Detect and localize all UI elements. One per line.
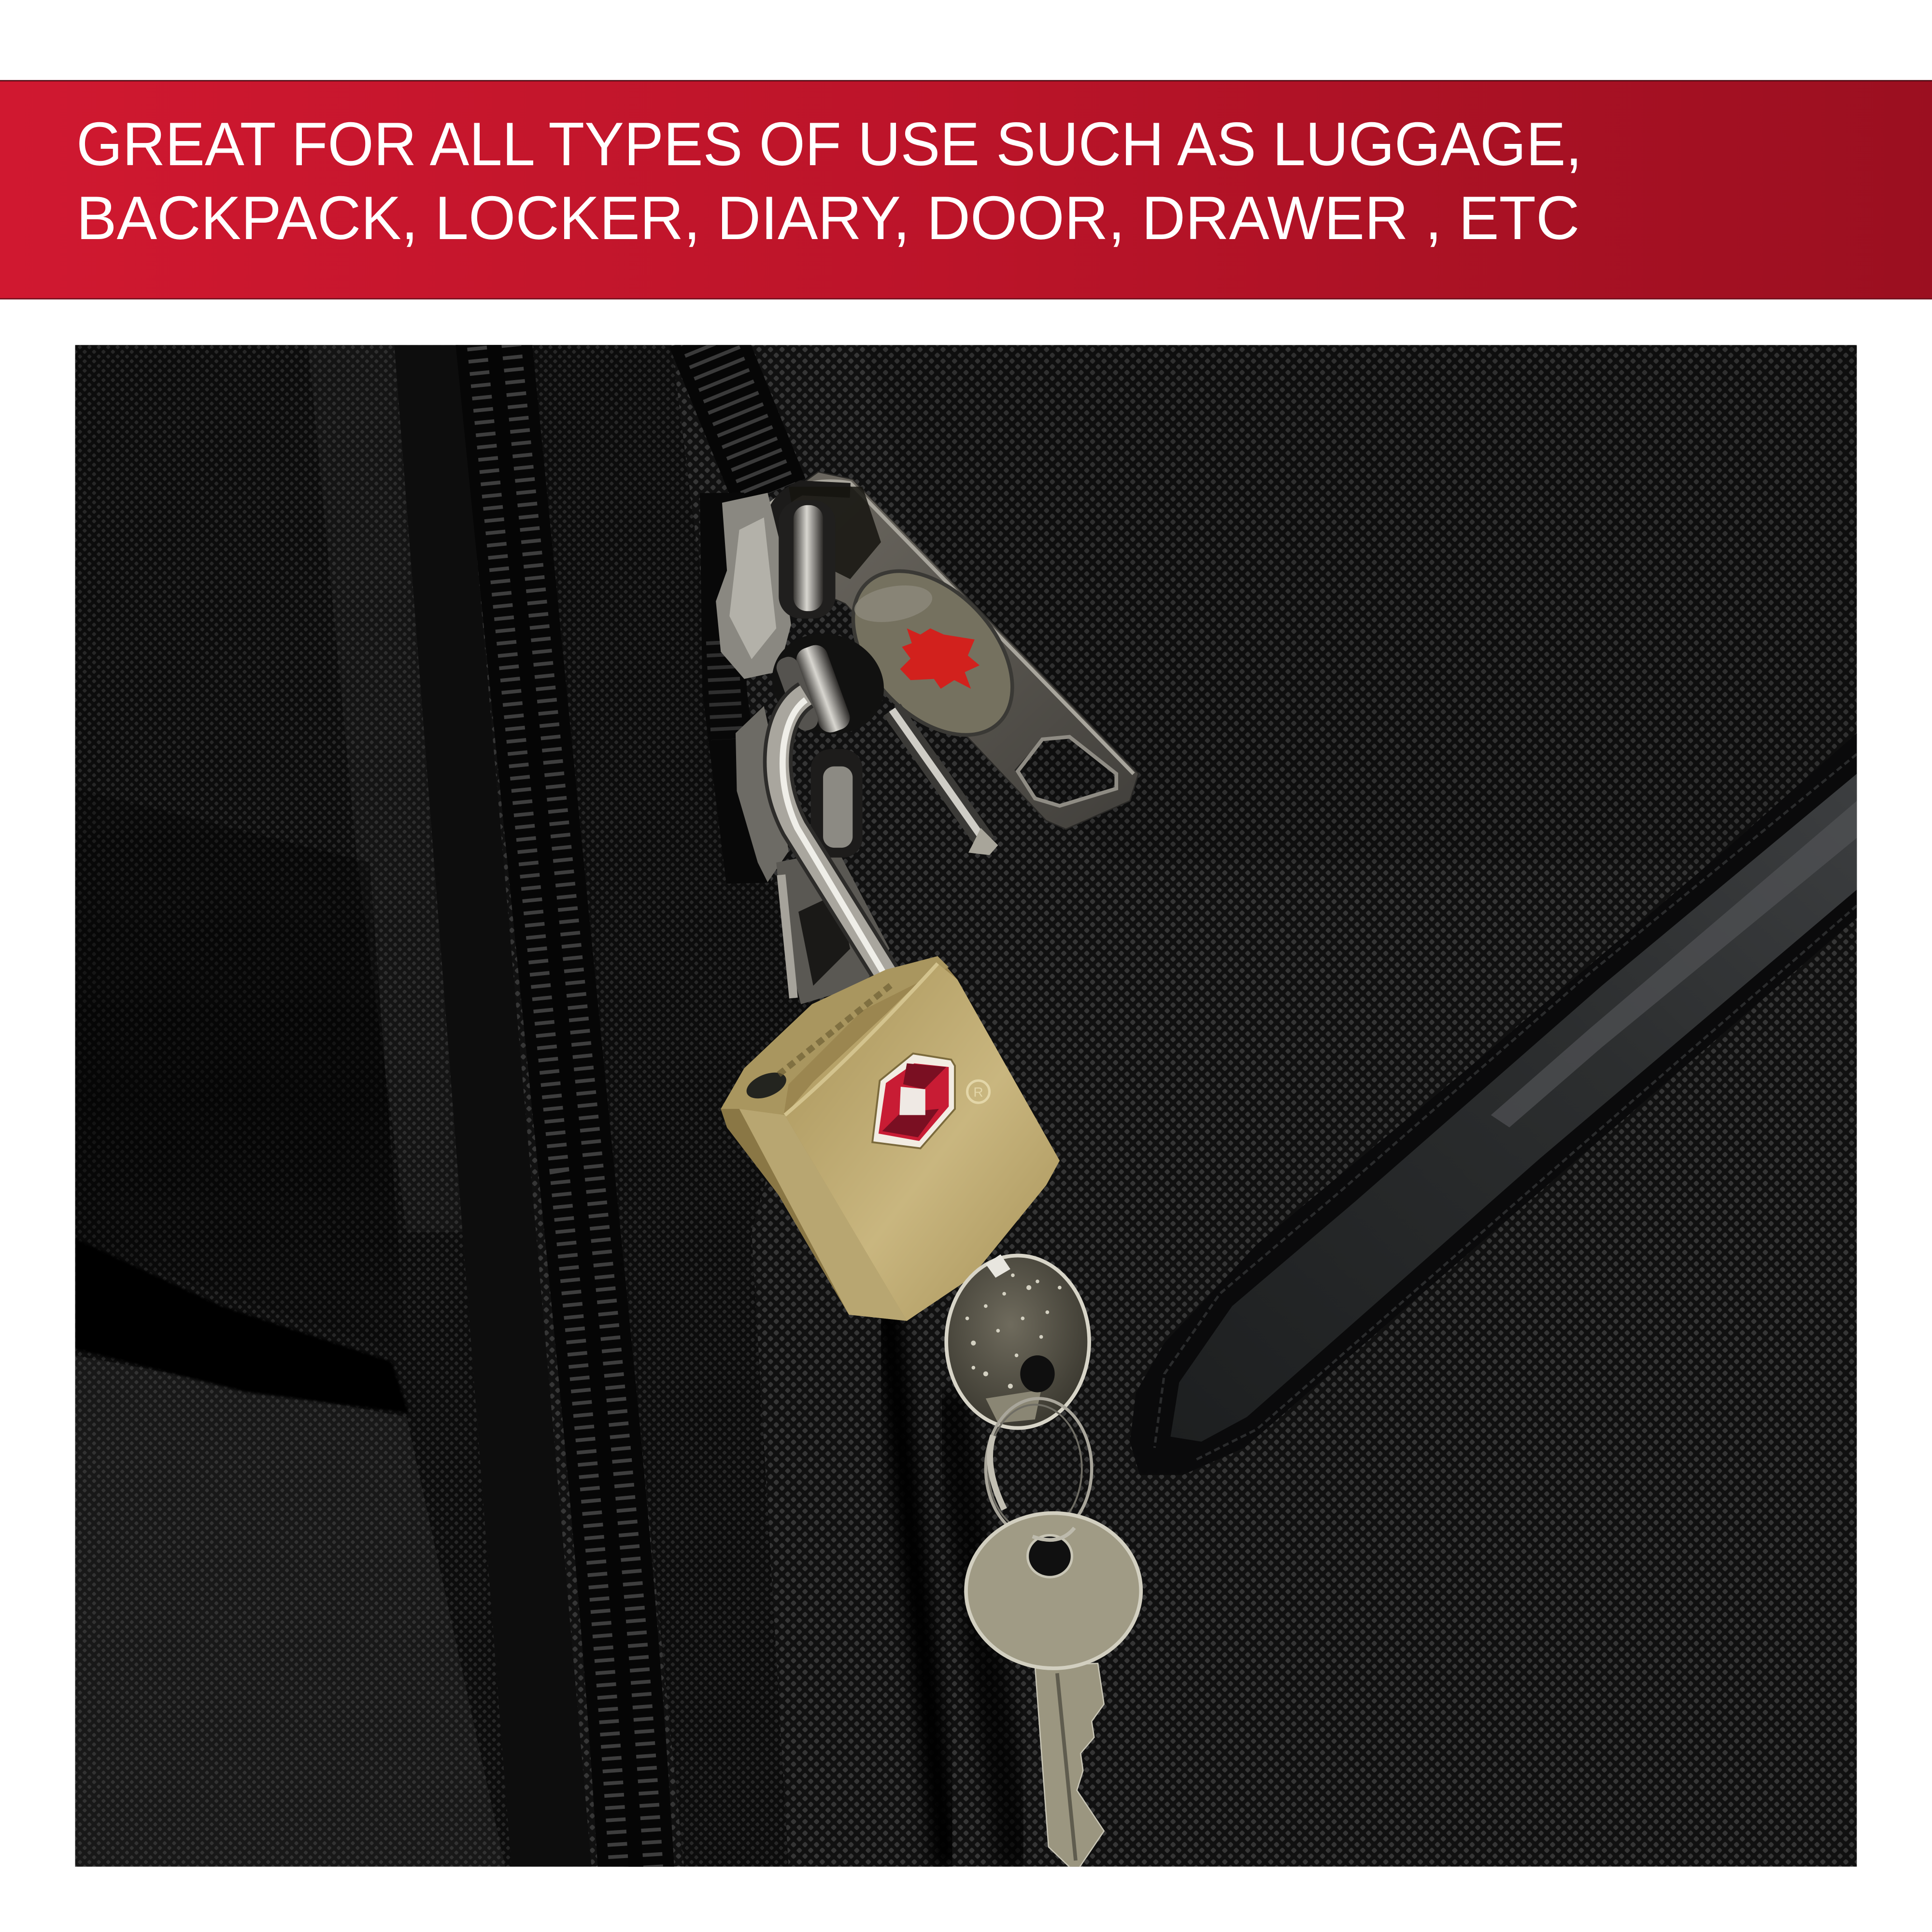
lower pocket panel: [685, 882, 1017, 1867]
lock front face: [785, 964, 1060, 1321]
main zipper: [493, 333, 637, 1885]
registered mark: R: [973, 1084, 983, 1099]
leather pocket trim: [1130, 733, 1857, 1475]
zipper ring rollers: [758, 618, 898, 750]
zipper slider lower: [736, 706, 890, 1004]
heading text: BACKPACK, LOCKER, DIARY, DOOR, DRAWER , ETC: [76, 184, 1579, 253]
icon: red maple leaf: [900, 628, 980, 689]
lock body: [721, 956, 1060, 1321]
heading text: [76, 110, 1582, 253]
lower key: [966, 1513, 1141, 1873]
back shackle leg: [892, 710, 998, 855]
padlock: [721, 956, 1060, 1321]
TSA logo hexagon: [872, 1053, 955, 1149]
keyhole notch: [743, 1067, 790, 1104]
pocket slit: [75, 1238, 409, 1413]
seam band beside zipper: [394, 345, 591, 1867]
left luggage panel: [75, 345, 511, 1867]
luggage fabric background: [75, 345, 1857, 1867]
lock side band: [739, 1109, 907, 1321]
fabric band between zippers: [532, 345, 789, 1867]
zipper pull with maple leaf: [762, 472, 1138, 829]
second zipper: [705, 333, 770, 887]
upper key: [946, 1254, 1089, 1428]
zipper slider upper: [716, 493, 836, 679]
heading text: GREAT FOR ALL TYPES OF USE SUCH AS LUGGAGE,: [76, 110, 1582, 179]
engraved top text: [779, 983, 893, 1074]
photo panel: padlock on black luggage: [75, 333, 1857, 1885]
key ring: [986, 1398, 1092, 1539]
upper link: [779, 500, 836, 619]
oval recess: [822, 541, 1043, 766]
banner: red heading band: [0, 80, 1932, 299]
shackle front leg: [778, 695, 893, 986]
lower link: [811, 749, 863, 858]
registered mark: [967, 1080, 989, 1103]
lock top band: [721, 956, 949, 1115]
